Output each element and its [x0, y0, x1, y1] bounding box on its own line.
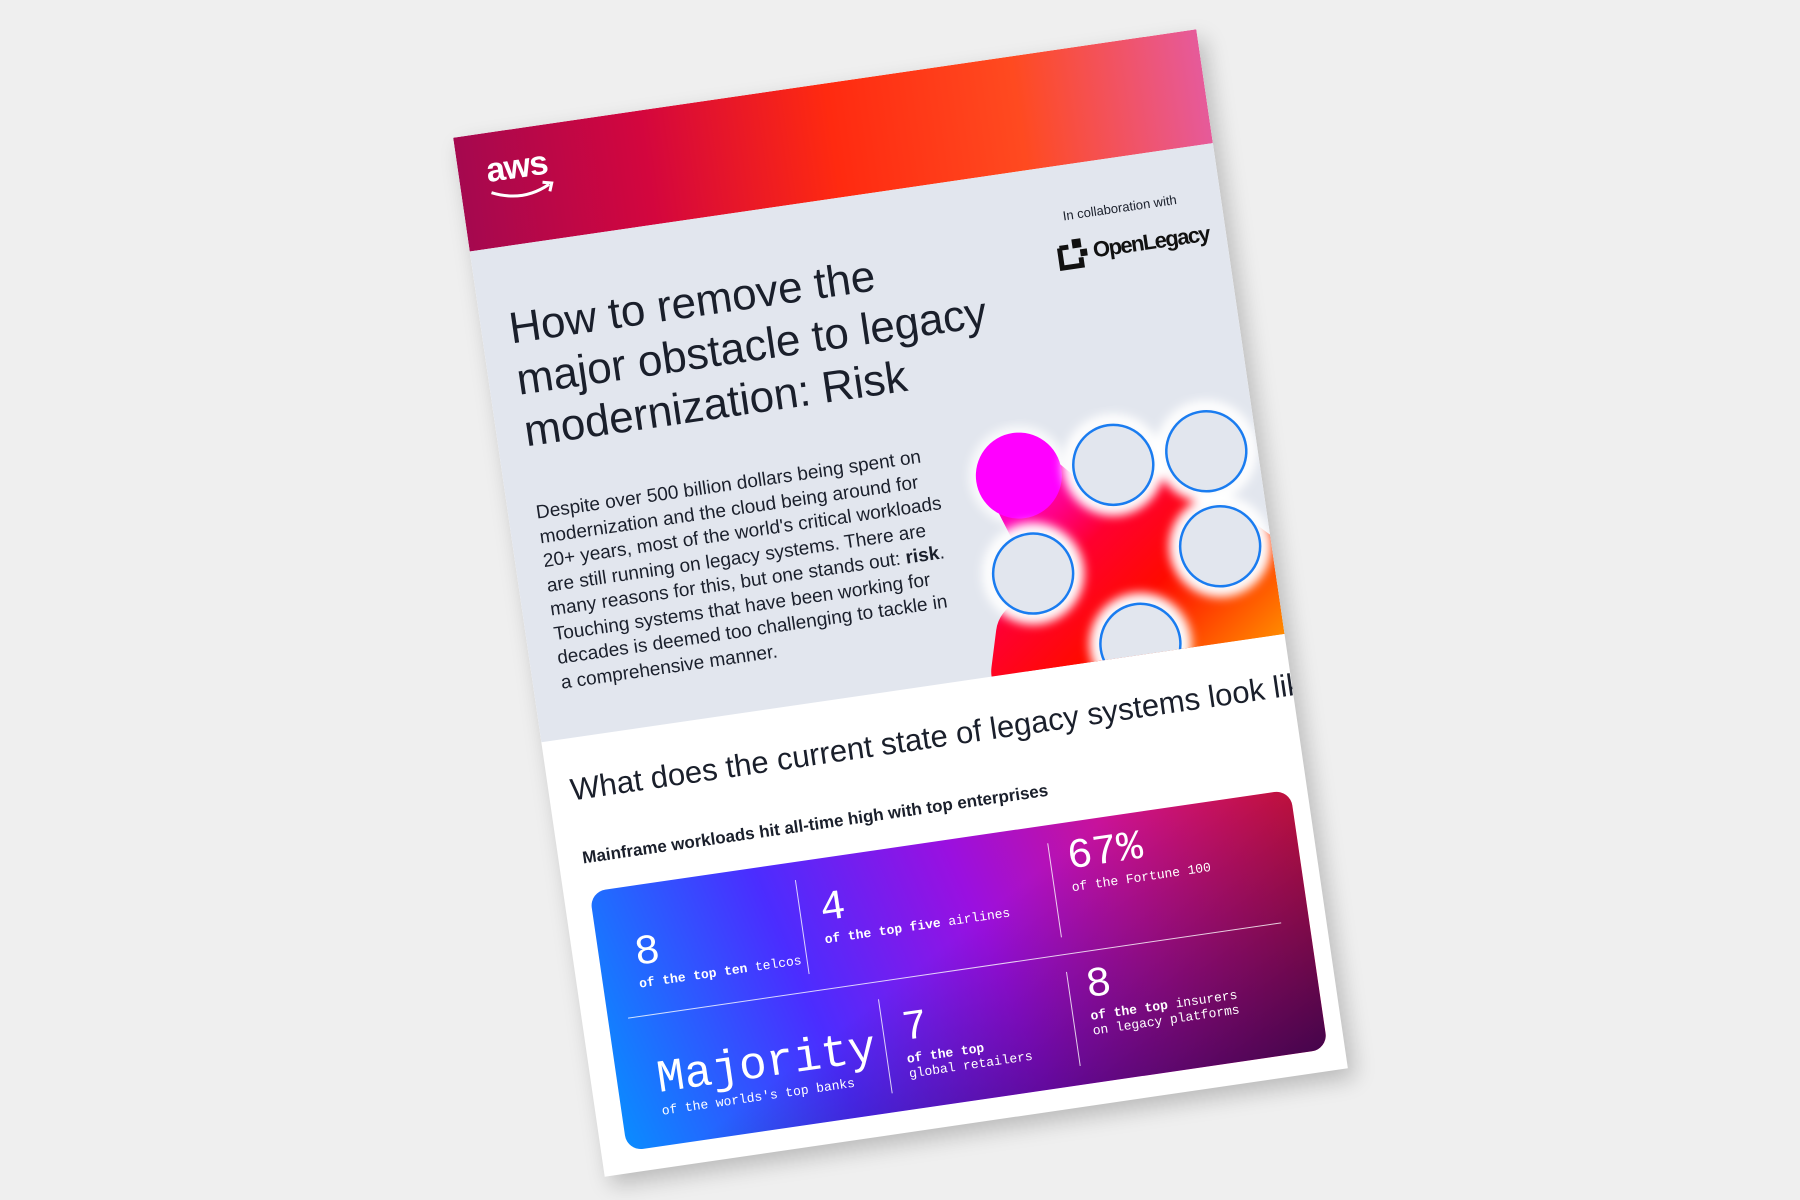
intro text: Despite over 500 billion dollars being spent on modernization and the cloud being around for 20+ years, most of the world's critical workloads are still running on legacy systems. There are many reasons for this, but one stands out: risk. Touching systems that have been working for decades is deemed too challenging to tackle in a comprehensive manner.: [535, 447, 949, 693]
stat: telcos: of the top ten telcos: [638, 953, 802, 992]
grey intro section: [470, 143, 1284, 742]
title: major obstacle to legacy: [513, 288, 990, 405]
stat: retailers: 7: [899, 1002, 931, 1053]
section heading: What does the current state of legacy systems look like?: [568, 661, 1339, 807]
stat: insurers: 8: [1083, 959, 1115, 1010]
stat: airlines: [817, 882, 1011, 947]
stat: insurers: on legacy platforms: [1092, 1002, 1241, 1039]
title: How to remove the: [506, 252, 878, 353]
stat: telcos: [631, 927, 802, 992]
stat: fortune 100: of the Fortune 100: [1071, 860, 1212, 895]
title: modernization: Risk: [521, 352, 910, 456]
stat: banks: Majority: [654, 1022, 880, 1106]
stat: retailers: global retailers: [908, 1049, 1034, 1082]
subheading: Mainframe workloads hit all-time high with top enterprises: [581, 781, 1049, 867]
stat: retailers: of the top: [906, 1041, 985, 1067]
stat: telcos: 8: [631, 927, 663, 978]
page: document: [453, 29, 1348, 1177]
stat: banks: of the worlds's top banks: [661, 1076, 856, 1119]
collaboration note: In collaboration with: [1062, 192, 1178, 223]
stat: insurers: [1083, 959, 1241, 1039]
header gradient band: [453, 29, 1213, 252]
stats card: [589, 790, 1328, 1151]
logo: aws: aws: [484, 144, 550, 190]
logo: OpenLegacy: [1057, 221, 1211, 271]
stat: retailers: [899, 1002, 1034, 1082]
stat: fortune 100: 67%: [1064, 823, 1146, 881]
logo: OpenLegacy: OpenLegacy: [1091, 221, 1211, 262]
stat: fortune 100: [1064, 823, 1212, 895]
title: [506, 252, 990, 456]
graphic: connected circles: [968, 398, 1284, 677]
stat: airlines: of the top five airlines: [824, 905, 1011, 947]
stat: insurers: of the top insurers: [1090, 988, 1238, 1024]
stat: airlines: 4: [817, 882, 849, 934]
collaboration note: [1057, 192, 1211, 271]
